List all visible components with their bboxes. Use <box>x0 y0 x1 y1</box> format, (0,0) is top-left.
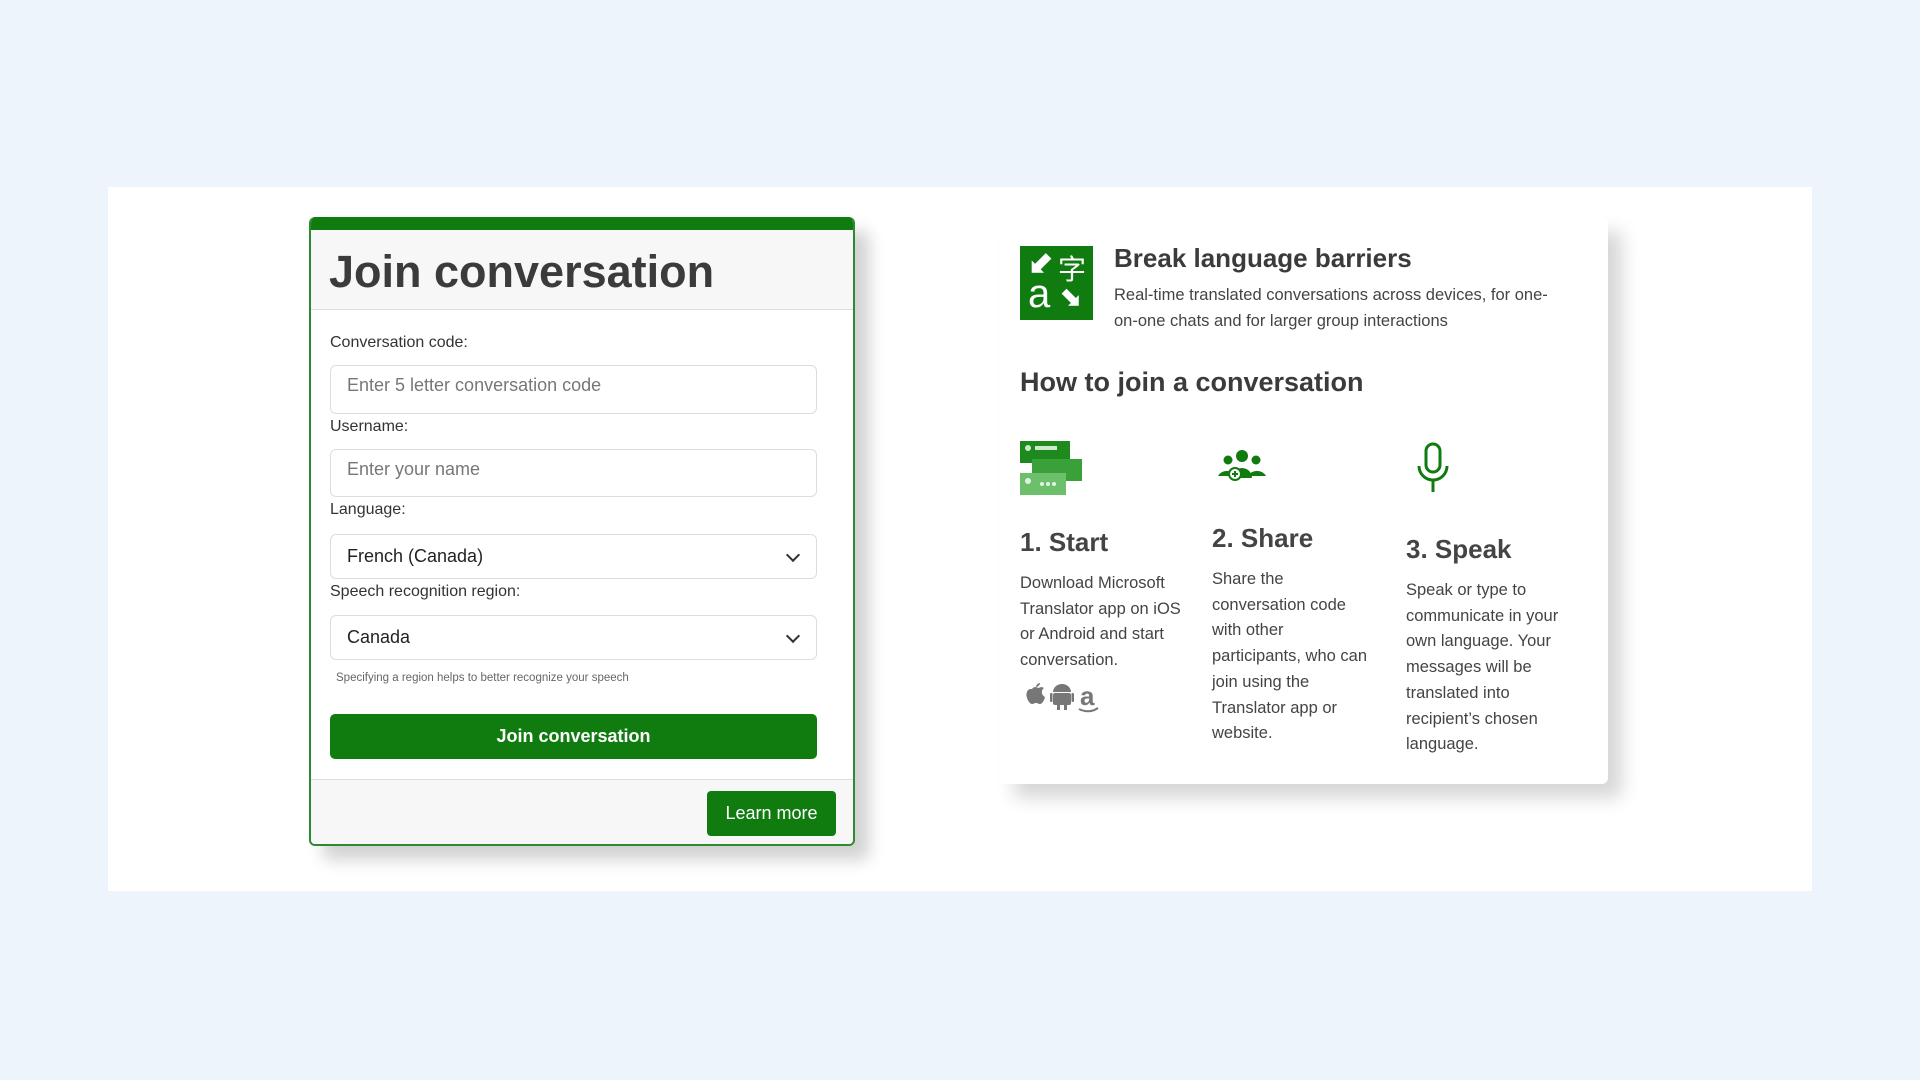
label: speech region: Speech recognition region: <box>330 583 520 600</box>
panel: info card <box>1000 217 1608 784</box>
select: language <box>330 534 817 579</box>
select: language: French (Canada) <box>347 546 483 566</box>
icon: translator logo: ⬊ <box>1060 282 1082 312</box>
step 1: start <box>1020 441 1181 712</box>
icon: chat cards <box>1020 441 1082 495</box>
icon: translator logo: ⬋ <box>1028 247 1053 280</box>
select: region: Canada <box>347 627 410 647</box>
button: learn more: Learn more <box>725 803 818 823</box>
input: username <box>330 449 817 497</box>
footer with learn more <box>311 779 853 846</box>
heading: 2. Share: 2. Share <box>1212 523 1313 553</box>
input: username: Enter your name <box>347 459 480 479</box>
header: Join conversation <box>311 230 853 310</box>
text: Speak or type to communicate in your own language. Your messages will be translated into recipient’s chosen language. <box>1406 581 1558 753</box>
icon: people <box>1218 450 1266 481</box>
panel: join form card <box>309 217 855 846</box>
description: Real-time translated conversations across devices, for one-on-one chats and for larger group interactions <box>1114 286 1548 330</box>
heading: how to join: How to join a conversation <box>1020 367 1364 397</box>
heading: break language barriers: Break language barriers <box>1114 243 1412 273</box>
hint text: Specifying a region helps to better recognize your speech <box>336 672 629 684</box>
icon: translator logo <box>1020 246 1093 320</box>
icons: platforms: a <box>1080 681 1095 711</box>
step 2: share <box>1212 450 1367 742</box>
text: Share the conversation code with other participants, who can join using the Translator app or website. <box>1212 570 1367 742</box>
button: join conversation <box>330 714 817 759</box>
input: conversation code <box>330 365 817 414</box>
label: language: Language: <box>330 501 406 518</box>
label: conversation code: Conversation code: <box>330 334 468 351</box>
green top bar <box>311 217 853 230</box>
label: username: Username: <box>330 418 408 435</box>
icon: translator logo: 字 <box>1058 248 1086 288</box>
text: Download Microsoft Translator app on iOS or Android and start conversation. <box>1020 574 1181 669</box>
heading: 3. Speak: 3. Speak <box>1406 534 1512 564</box>
input: conversation code: Enter 5 letter conversation code <box>347 375 601 395</box>
icons: platforms <box>1026 681 1098 712</box>
button: join conversation: Join conversation <box>496 726 651 746</box>
header: Join conversation: Join conversation <box>329 246 714 297</box>
select: region <box>330 615 817 660</box>
icon: translator logo: a <box>1028 272 1050 316</box>
step 3: speak <box>1406 442 1558 753</box>
heading: 1. Start: 1. Start <box>1020 527 1108 557</box>
icon: microphone <box>1418 442 1448 492</box>
button: learn more <box>707 791 836 836</box>
